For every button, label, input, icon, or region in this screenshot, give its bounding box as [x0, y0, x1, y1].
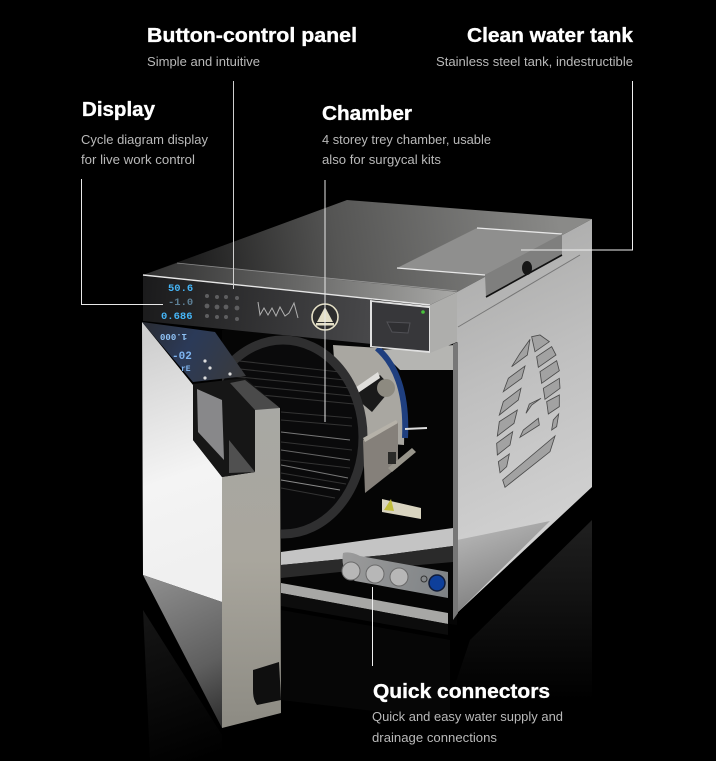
callout: quick connectors: Quick connectors	[373, 681, 550, 703]
leader line: quick connectors	[372, 587, 374, 666]
callout: clean water tank: Clean water tank	[467, 25, 634, 47]
leader line: clean water tank	[521, 81, 632, 250]
callout: quick connectors	[372, 681, 563, 745]
display readouts: 50.6	[168, 283, 193, 295]
side divider	[453, 342, 458, 620]
open interior	[222, 330, 457, 625]
side vent logo	[497, 335, 560, 487]
floor reflection	[143, 520, 592, 761]
door outer face	[142, 322, 222, 602]
callout: display: Display	[82, 99, 156, 121]
door glass display: rE	[181, 365, 191, 374]
brand logo	[312, 304, 338, 330]
callout: clean water tank	[436, 25, 634, 69]
door hinge latch	[253, 662, 281, 705]
callout: quick connectors: drainage connections	[372, 731, 497, 745]
display readouts: 0.686	[161, 311, 193, 323]
quick connector plate	[342, 552, 448, 598]
door glass display: 1.000	[160, 331, 187, 341]
leader line: display	[82, 179, 163, 304]
lower white strip	[281, 528, 453, 565]
display readouts	[161, 283, 193, 323]
callout: display: for live work control	[81, 153, 195, 167]
callout: chamber: Chamber	[322, 103, 412, 125]
door handle block	[193, 378, 280, 477]
leader line: button-control panel	[232, 81, 234, 289]
callout: button-control panel: Button-control panel	[147, 25, 357, 47]
callout: clean water tank: Stainless steel tank, indestructible	[436, 55, 633, 69]
callout: display	[81, 99, 209, 167]
callout: button-control panel: Simple and intuitive	[147, 55, 260, 69]
side panel	[457, 219, 592, 613]
callout: chamber: also for surgycal kits	[322, 153, 441, 167]
lip right face	[430, 292, 457, 353]
door glass display	[142, 322, 246, 382]
warning label	[382, 499, 421, 519]
lower silver strip	[281, 583, 448, 624]
chamber	[203, 340, 363, 534]
callout: button-control panel	[147, 25, 357, 69]
callout: chamber	[322, 103, 491, 167]
chamber grating	[230, 360, 354, 498]
top lip	[143, 263, 457, 305]
display readouts: -1.0	[168, 297, 193, 309]
machine top cover	[143, 200, 592, 292]
callout: quick connectors: Quick and easy water supply and	[372, 710, 563, 724]
rear light area behind chamber	[333, 345, 455, 445]
metal bracket and connector	[363, 420, 416, 493]
door glass display: -02	[172, 351, 192, 363]
callout: display: Cycle diagram display	[81, 133, 209, 147]
printer	[370, 300, 430, 353]
cycle diagram	[258, 302, 298, 318]
panel buttons	[205, 294, 239, 321]
control panel	[143, 275, 430, 344]
knobs	[342, 562, 360, 580]
leader line: chamber	[324, 180, 326, 422]
door	[142, 322, 281, 728]
callout: chamber: 4 storey trey chamber, usable	[322, 133, 491, 147]
autoclave machine	[142, 200, 592, 728]
clean water tank lid	[397, 228, 562, 297]
door edge	[222, 408, 281, 728]
power button	[429, 575, 445, 591]
